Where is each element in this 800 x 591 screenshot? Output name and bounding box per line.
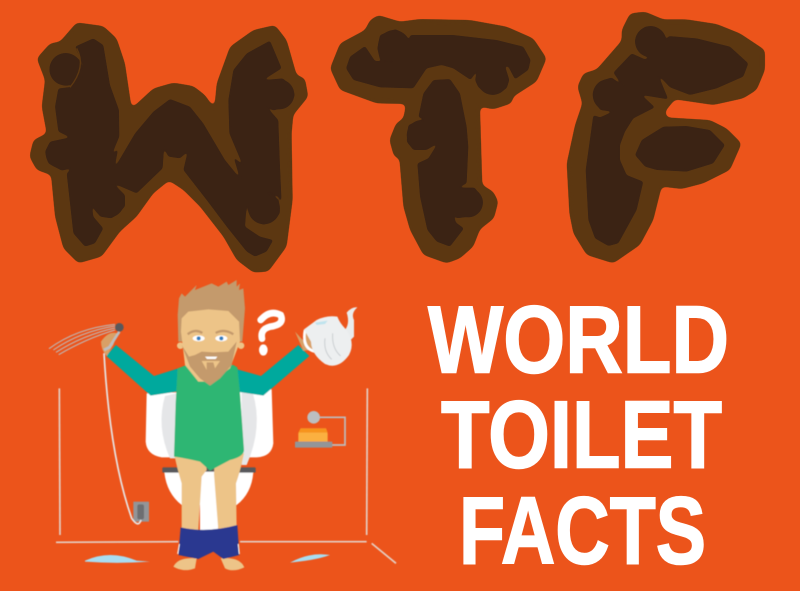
letter T made of poo	[330, 15, 547, 263]
sleeves	[106, 345, 309, 396]
title: World Toilet Facts: WORLD	[428, 286, 729, 394]
letter F made of poo	[567, 12, 765, 263]
head	[177, 280, 245, 386]
teapot	[304, 307, 357, 366]
title: World Toilet Facts	[428, 286, 729, 584]
legs	[174, 453, 244, 530]
title: World Toilet Facts: TOILET	[441, 382, 722, 488]
feet	[173, 558, 244, 570]
shower head with water spray and hose	[49, 323, 141, 524]
wall and floor lines	[56, 388, 396, 563]
title: World Toilet Facts: FACTS	[459, 478, 706, 584]
shorts	[178, 525, 239, 559]
question mark	[259, 313, 282, 356]
shirt	[174, 365, 244, 471]
soap dish	[295, 411, 345, 448]
bathroom illustration	[49, 280, 396, 570]
toilet	[146, 389, 273, 531]
hand holding teapot	[295, 330, 315, 351]
puddles of water	[85, 554, 330, 563]
wall outlet	[133, 502, 149, 522]
letter W made of poo	[29, 22, 308, 273]
hand holding shower head	[101, 333, 117, 356]
